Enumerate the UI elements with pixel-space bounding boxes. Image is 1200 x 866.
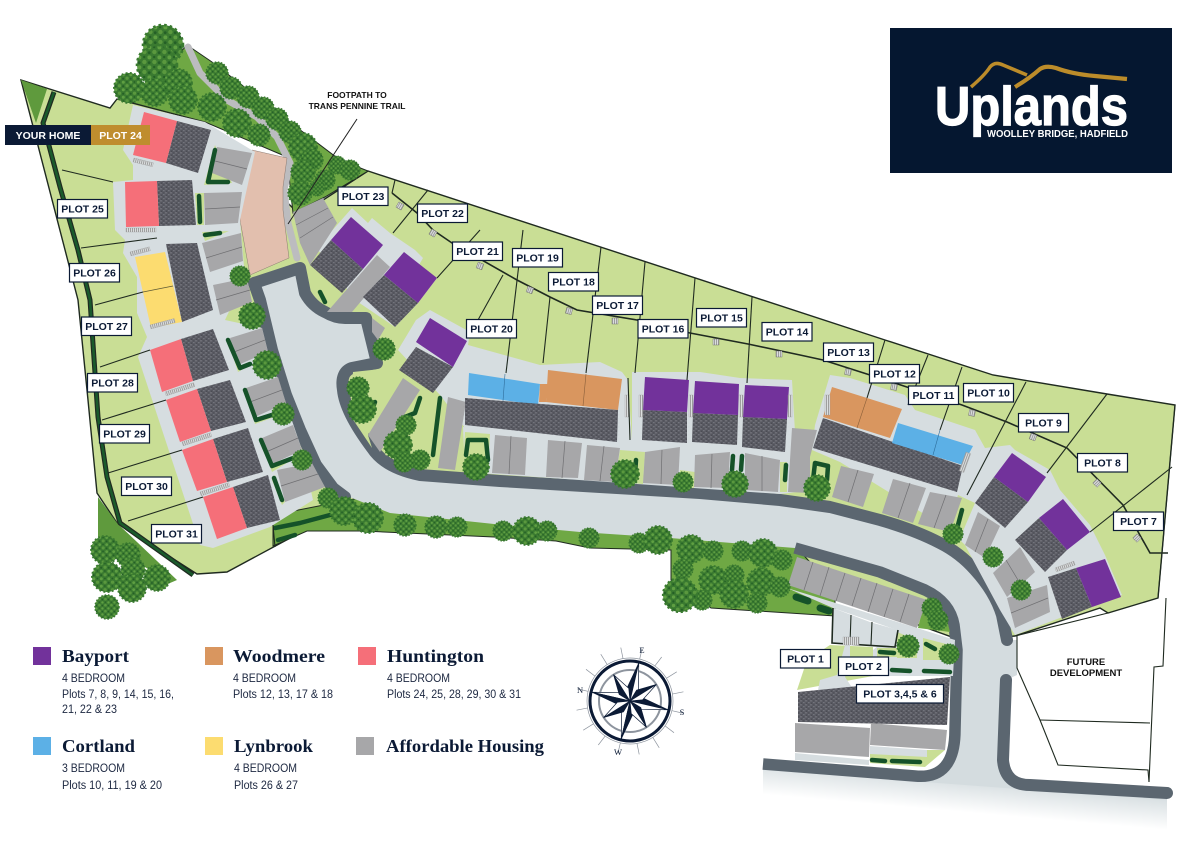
thick rear boundary path line — [392, 193, 1168, 553]
label: plot 8: PLOT 8 — [1084, 458, 1121, 470]
label: plot 10 — [964, 384, 1014, 402]
Bayport houses: plots 7, 8, 9 — [975, 453, 1121, 619]
Cortland pair: plots 19 and 20 — [468, 373, 540, 405]
label: plot 20 — [466, 320, 516, 338]
label: plot 9: PLOT 9 — [1025, 418, 1062, 430]
label: plot 20: PLOT 20 — [470, 324, 513, 336]
label: plot 26 — [70, 264, 120, 282]
logo location: WOOLLEY BRIDGE, HADFIELD — [987, 128, 1128, 140]
main estate road — [254, 268, 1167, 800]
woodland strip: north-west — [133, 45, 368, 213]
plot 1 and 2 lawns and paths — [797, 608, 898, 692]
label: plot 22 — [418, 204, 468, 222]
label: plots 3 to 6: PLOT 3,4,5 & 6 — [863, 688, 937, 700]
label: plot 23: PLOT 23 — [342, 191, 384, 203]
label: plot 16 — [638, 320, 688, 338]
logo wordmark: Uplands — [935, 75, 1128, 137]
legend — [33, 646, 544, 792]
label: plot 13: PLOT 13 — [827, 347, 870, 359]
legend: Lynbrook: Plots 26 & 27 — [234, 780, 298, 792]
green verge south of road — [273, 490, 835, 616]
label: plot 28: PLOT 28 — [91, 378, 134, 390]
Bayport houses: plots 20 to 23 — [310, 217, 467, 393]
label: plot 31: PLOT 31 — [155, 528, 198, 540]
Lynbrook houses: plots 26 and 27 — [135, 243, 213, 328]
label: plot 21 — [452, 242, 502, 260]
Woodmere pair: plots 12 and 13 — [823, 387, 902, 438]
parking strip south of road — [788, 557, 927, 628]
label: plot 19: PLOT 19 — [516, 252, 559, 264]
compass rose: E — [639, 645, 645, 655]
site base: garden land — [21, 80, 1175, 640]
label: plot 29: PLOT 29 — [103, 428, 146, 440]
legend: Cortland — [33, 736, 162, 792]
plot labels — [58, 187, 1164, 703]
legend: Bayport: Plots 7, 8, 9, 14, 15, 16, — [62, 689, 174, 701]
label: plot 25: PLOT 25 — [61, 204, 104, 216]
legend: Lynbrook: Lynbrook — [234, 736, 313, 756]
legend: Bayport: 4 BEDROOM — [62, 673, 125, 685]
legend: Cortland: Cortland — [62, 736, 135, 756]
parking bays: north-west corner — [293, 198, 337, 265]
label: plot 17: PLOT 17 — [596, 300, 639, 312]
label: plot 29 — [100, 424, 150, 443]
patio steps — [126, 158, 1075, 645]
your home banner: YOUR HOME — [16, 130, 80, 142]
legend: Woodmere — [205, 646, 333, 701]
road kerb: south-east side — [763, 548, 957, 776]
label: plot 1 — [780, 650, 830, 668]
label: plot 30 — [122, 477, 172, 496]
label: plot 27 — [82, 317, 132, 336]
woodland corner: south-west — [98, 497, 177, 583]
compass rose: W — [614, 747, 622, 757]
label: plot 19 — [512, 248, 562, 267]
label: plot 23 — [338, 187, 388, 206]
label: plot 27: PLOT 27 — [85, 321, 128, 333]
footpath callout: TRANS PENNINE TRAIL — [309, 101, 405, 111]
label: plot 9 — [1018, 414, 1068, 432]
hedges — [199, 150, 962, 762]
label: plot 22: PLOT 22 — [421, 208, 464, 220]
Woodmere pair: plots 17 and 18 — [539, 370, 622, 410]
label: plot 14 — [762, 322, 812, 341]
planting beds — [195, 145, 975, 767]
road fade at site entrance — [763, 764, 1167, 840]
driveways between north-west houses — [327, 255, 466, 470]
trees — [91, 25, 1031, 664]
legend: Bayport — [33, 646, 174, 716]
label: plot 8 — [1078, 454, 1128, 472]
label: plots 3 to 6 — [856, 684, 944, 703]
legend: Bayport: Bayport — [62, 646, 129, 666]
shared surface: pink paving — [240, 150, 289, 275]
label: plot 12: PLOT 12 — [873, 368, 916, 380]
legend: Huntington — [358, 646, 521, 701]
label: plot 15: PLOT 15 — [700, 312, 743, 324]
label: plot 21: PLOT 21 — [456, 246, 499, 258]
label: plot 2 — [838, 657, 888, 676]
label: plot 31 — [152, 524, 202, 543]
your home banner: PLOT 24 — [99, 130, 142, 142]
label: plot 11 — [908, 386, 958, 404]
legend: Cortland: 3 BEDROOM — [62, 763, 125, 775]
legend: Lynbrook: 4 BEDROOM — [234, 763, 297, 775]
label: plot 10: PLOT 10 — [967, 388, 1010, 400]
compass rose: N — [577, 685, 583, 695]
label: plot 14: PLOT 14 — [766, 326, 808, 338]
legend: Cortland: Plots 10, 11, 19 & 20 — [62, 780, 162, 792]
paved surrounds: south block court — [787, 588, 955, 676]
future development plot outline — [1015, 598, 1166, 782]
legend: Affordable Housing: Affordable Housing — [386, 736, 544, 756]
legend: Woodmere: Woodmere — [233, 646, 325, 666]
label: plot 16: PLOT 16 — [642, 324, 684, 336]
label: plot 28 — [88, 374, 138, 392]
logo hills — [971, 63, 1127, 87]
paved surrounds: north-east houses — [315, 208, 1122, 635]
label: plot 12 — [870, 364, 920, 383]
paved surrounds: parking row — [463, 427, 815, 494]
label: plot 30: PLOT 30 — [125, 481, 168, 493]
future development label: FUTURE — [1067, 657, 1105, 668]
label: plot 1: PLOT 1 — [787, 654, 824, 666]
rear gates — [396, 202, 1141, 542]
parking bays: east curve — [832, 466, 1050, 628]
your home banner — [5, 125, 150, 145]
label: plot 2: PLOT 2 — [845, 661, 882, 673]
parking bays: west side — [202, 147, 325, 502]
label: plot 11: PLOT 11 — [912, 390, 955, 402]
compass rose: S — [680, 707, 685, 717]
logo panel — [890, 28, 1172, 173]
Cortland pair: plots 10 and 11 — [892, 423, 973, 465]
footpath to Trans Pennine Trail — [188, 47, 297, 258]
legend: Huntington: Plots 24, 25, 28, 29, 30 & 31 — [387, 689, 521, 701]
legend: Woodmere: 4 BEDROOM — [233, 673, 296, 685]
compass rose — [565, 636, 695, 766]
Bayport houses: plots 14, 15, 16 — [642, 377, 789, 452]
terrace roof: plots 17 to 20 — [465, 398, 618, 442]
boundary hedge along west edge — [43, 92, 193, 575]
label: plot 13 — [824, 343, 874, 362]
label: plot 7 — [1114, 512, 1164, 530]
legend: Huntington: Huntington — [387, 646, 484, 666]
label: plot 18: PLOT 18 — [552, 276, 595, 288]
future development label: DEVELOPMENT — [1050, 668, 1122, 679]
label: plot 7: PLOT 7 — [1120, 516, 1157, 528]
Plots 3 to 6 terrace — [795, 677, 950, 765]
legend: Huntington: 4 BEDROOM — [387, 673, 450, 685]
woodland corner: west tip — [21, 80, 47, 123]
parking bays: central row — [492, 428, 817, 493]
legend: Woodmere: Plots 12, 13, 17 & 18 — [233, 689, 333, 701]
label: plot 26: PLOT 26 — [73, 268, 116, 280]
label: plot 17 — [592, 296, 642, 314]
road kerb: entrance east side — [1003, 680, 1167, 793]
footpath callout — [288, 90, 405, 224]
label: plot 18 — [548, 272, 598, 291]
road kerb: north and west side — [254, 268, 1007, 640]
label: plot 15 — [696, 308, 746, 327]
label: plot 25 — [58, 200, 108, 218]
Huntington houses: west terrace — [125, 112, 280, 539]
legend: Bayport: 21, 22 & 23 — [62, 704, 117, 716]
legend: Lynbrook — [205, 736, 313, 792]
footpath callout: FOOTPATH TO — [327, 90, 387, 100]
plot boundary lines — [62, 170, 1175, 598]
green lawn by parking strip — [918, 600, 950, 632]
terrace roof: plots 10 to 13 — [813, 418, 963, 492]
paved surrounds: west terrace — [113, 105, 313, 548]
